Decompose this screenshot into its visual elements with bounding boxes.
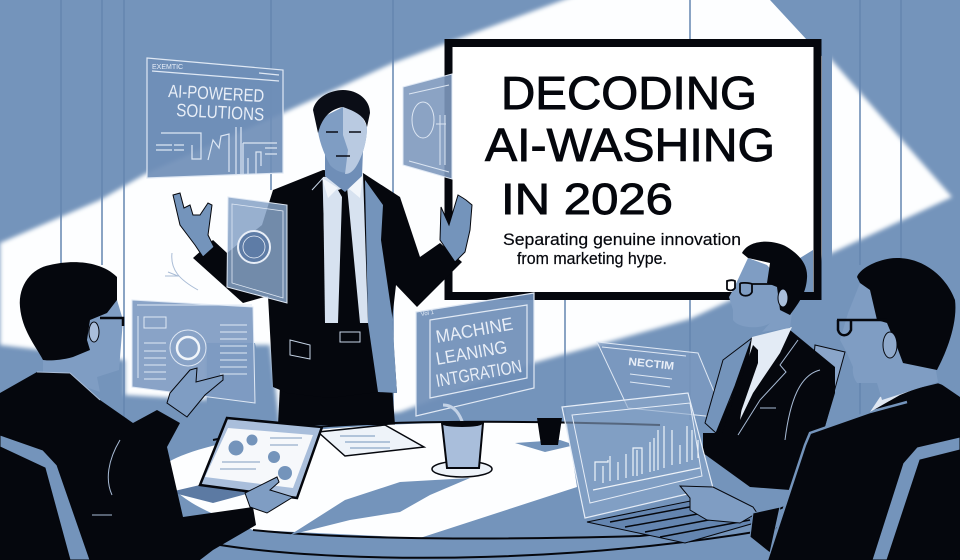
hair	[742, 242, 807, 315]
presenter: jacket	[193, 170, 462, 398]
left man's raised hand	[167, 368, 223, 417]
glasses	[837, 320, 887, 335]
presenter	[173, 90, 472, 425]
holographic panel: AI-powered solutions: SOLUTIONS	[176, 100, 265, 125]
jacket	[767, 382, 960, 560]
coffee cup	[432, 405, 492, 477]
laptop	[170, 418, 322, 503]
hand	[680, 486, 757, 523]
holographic panel: machine learning integration: MACHINE	[434, 314, 515, 347]
holographic panel: AI-powered solutions: EXEMTIC	[152, 64, 183, 71]
holographic panel: AI-powered solutions: AI-POWERED	[168, 81, 265, 106]
chair behind	[810, 345, 845, 425]
title	[485, 67, 775, 224]
presenter: right hand	[440, 195, 472, 262]
neck and face	[840, 283, 938, 400]
holographic panel: machine learning integration: LEANING	[434, 337, 509, 369]
holographic panel: machine learning integration: INTGRATION	[434, 356, 523, 391]
left foreground man	[0, 262, 293, 560]
holographic panel: machine learning integration	[416, 293, 534, 416]
holographic panel: left dial dashboard	[132, 300, 270, 420]
presenter: hair	[313, 90, 370, 133]
holographic panel: upper tilted sheet: NECTIM	[628, 356, 675, 373]
right-centre man	[703, 242, 845, 490]
hand motion marks	[165, 253, 198, 290]
presenter: legs	[278, 385, 395, 425]
presenter: tie	[338, 187, 360, 335]
presenter: left hand	[173, 193, 214, 257]
hair	[857, 258, 955, 370]
hair	[20, 262, 117, 360]
glasses	[727, 280, 779, 296]
sleeve	[750, 507, 780, 553]
jacket	[703, 330, 835, 490]
small black cup	[537, 418, 562, 445]
holographic panel: circular dial	[227, 197, 287, 303]
subtitle	[503, 230, 741, 268]
holographic panel: bar chart	[562, 393, 713, 518]
right chair	[872, 437, 960, 560]
jacket	[0, 372, 256, 560]
neck and face	[43, 300, 123, 392]
ear	[778, 289, 788, 307]
holographic panel: upper tilted sheet	[597, 342, 725, 418]
neck and face	[729, 258, 793, 332]
left man's hand on laptop	[245, 477, 293, 513]
document on table	[318, 425, 424, 456]
presenter: neck and face	[325, 150, 363, 192]
subtitle: from marketing hype.	[517, 249, 667, 268]
left chair	[0, 435, 90, 560]
holographic panel: AI-powered solutions	[147, 58, 283, 178]
collar	[870, 383, 930, 412]
conference table	[160, 422, 960, 560]
title: DECODING	[501, 67, 757, 119]
table shadows	[290, 432, 640, 535]
ear	[883, 332, 897, 358]
holographic panel: machine learning integration: Vol 1	[420, 310, 435, 318]
presenter: shirt	[323, 173, 368, 323]
title: IN 2026	[501, 175, 673, 224]
right foreground man	[680, 258, 960, 560]
holographic panel: top right sketch	[403, 74, 452, 179]
subtitle: Separating genuine innovation	[503, 230, 741, 249]
keyboard	[587, 495, 765, 543]
title: AI-WASHING	[485, 119, 775, 171]
title board	[448, 43, 818, 296]
